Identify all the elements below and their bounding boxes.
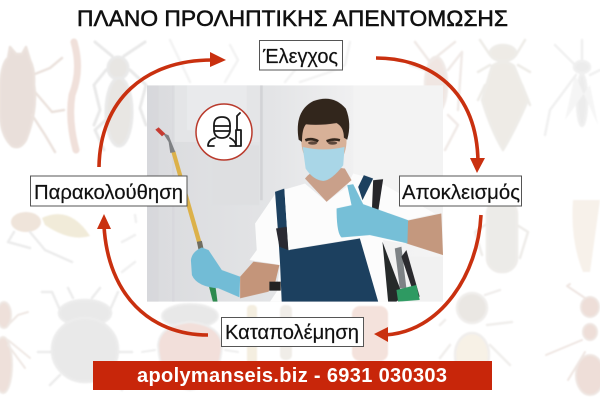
label: inspection <box>260 40 342 70</box>
insect: grey weevil <box>94 42 146 150</box>
label: monitoring <box>30 176 187 206</box>
label: exclusion <box>400 176 522 206</box>
insect: pale legs near top centre <box>170 40 350 82</box>
insect: reddish bug top right <box>410 42 462 150</box>
insect: pale winged bug far right <box>572 200 600 272</box>
insect: wasp <box>8 212 90 262</box>
photo: pest control technician <box>147 85 443 302</box>
insect: bee <box>440 290 512 377</box>
insect: mosquito <box>545 40 600 135</box>
insect: termite left <box>0 302 30 393</box>
arrow: monitoring to inspection <box>99 52 226 167</box>
insect: central tan bugs <box>247 305 388 365</box>
insect: ladybug <box>142 304 238 390</box>
arrow: inspection to exclusion <box>376 58 485 173</box>
insect: worm <box>71 42 78 150</box>
arrow: exclusion to control <box>374 215 481 342</box>
insect: red ant <box>546 284 600 395</box>
insect: dragonfly larva <box>478 40 530 150</box>
arrow: control to monitoring <box>97 214 208 335</box>
title: ΠΛΑΝΟ ΠΡΟΛΗΠΤΙΚΗΣ ΑΠΕΝΤΟΜΩΣΗΣ <box>77 6 508 31</box>
insect: grey beetle <box>38 288 132 390</box>
label: exclusion: Αποκλεισμός <box>402 182 520 204</box>
label: monitoring: Παρακολούθηση <box>34 182 183 204</box>
label: control: Καταπολέμηση <box>225 322 359 344</box>
insect: left of photo bottom <box>122 215 136 272</box>
contact banner <box>93 361 492 390</box>
icon: technician in protective gear <box>196 104 252 160</box>
insect: grey beetle right <box>475 200 528 272</box>
label: inspection: Έλεγχος <box>262 46 338 68</box>
insect: stag beetle <box>0 47 64 152</box>
contact banner: apolymanseis.biz - 6931 030303 <box>137 365 447 387</box>
